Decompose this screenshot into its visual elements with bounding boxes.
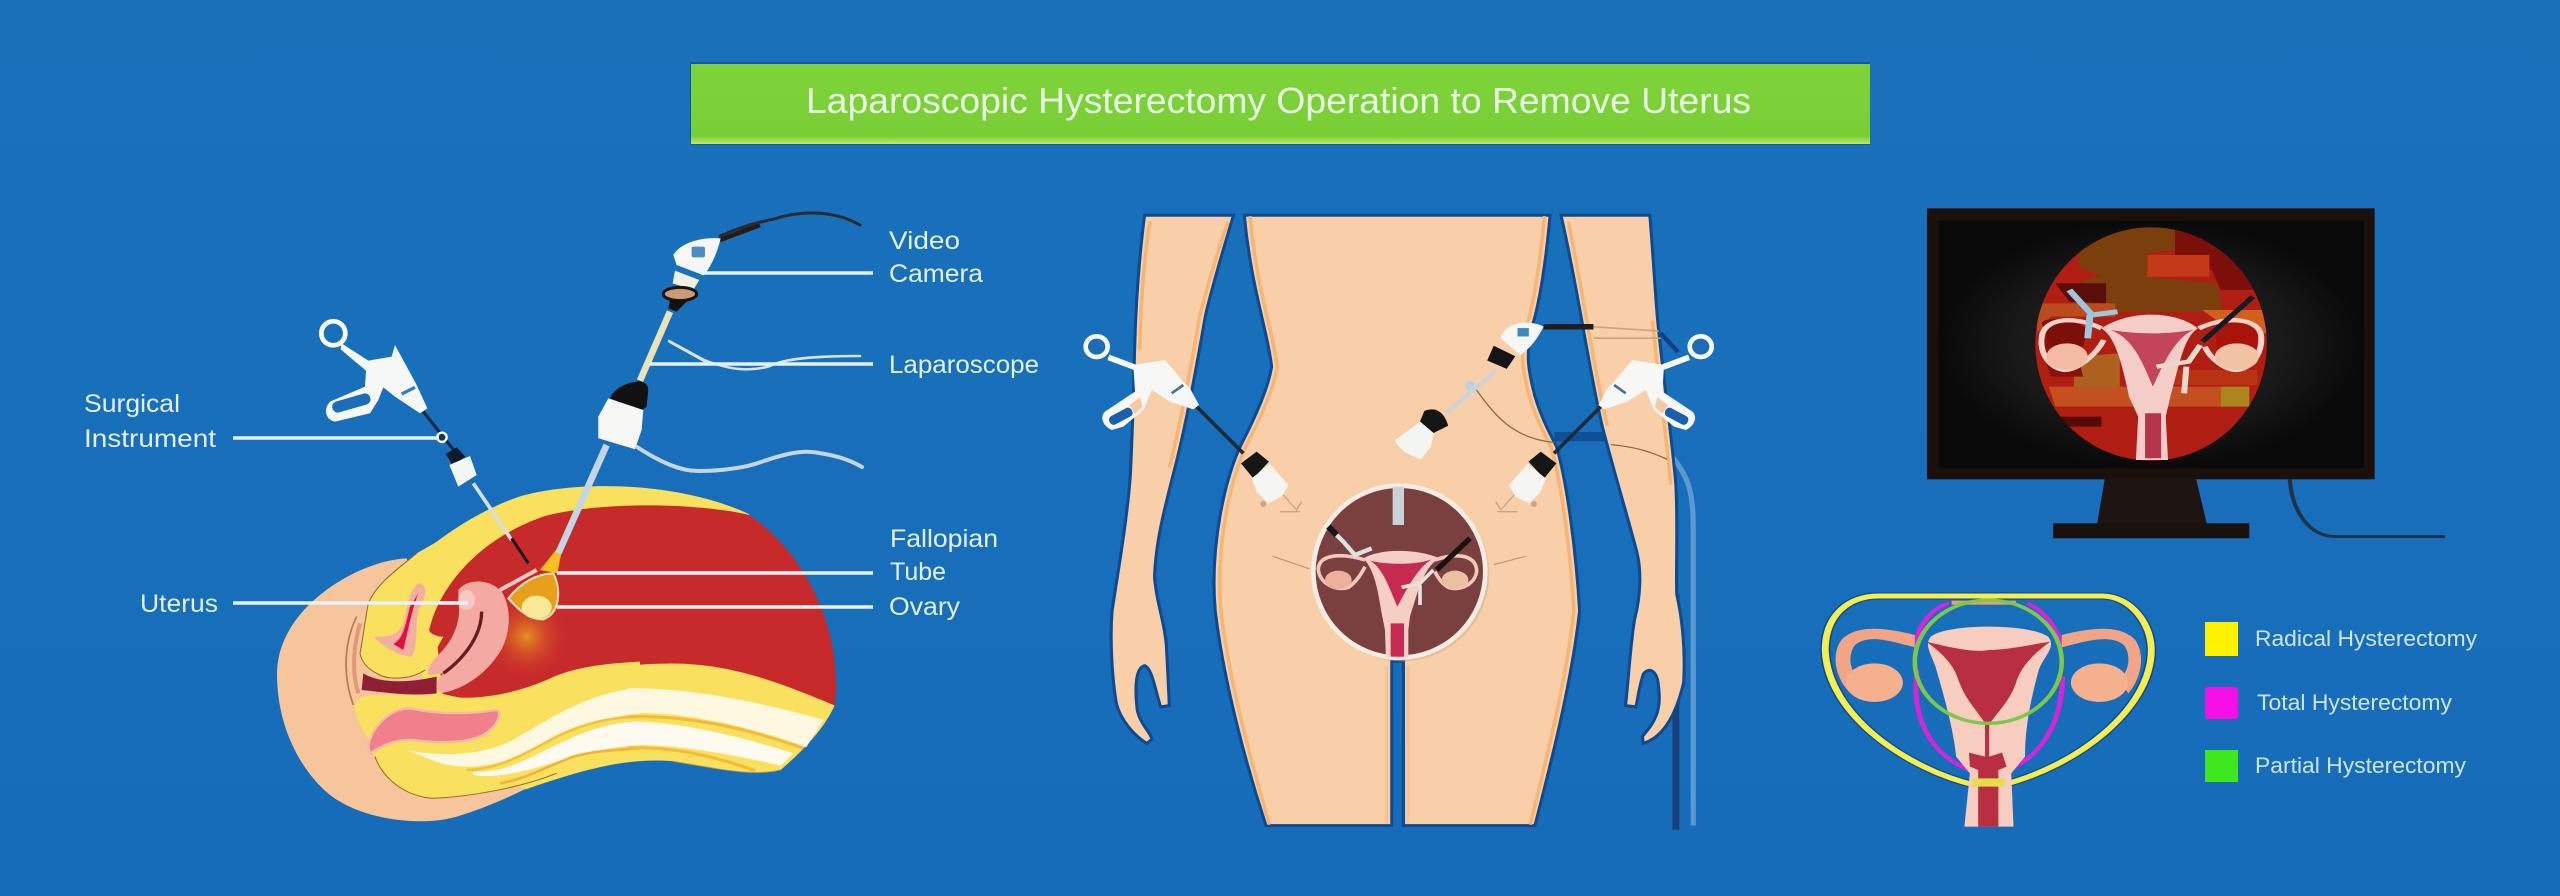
ovary and tube <box>500 570 537 590</box>
scope <box>558 225 760 553</box>
diagram: hysterectomy types <box>1825 596 2151 827</box>
total outline <box>1915 603 2063 770</box>
spine bands, right part <box>628 688 823 772</box>
label lines <box>233 273 873 607</box>
labels: side view: Tube <box>890 558 946 586</box>
rectum <box>368 708 499 753</box>
on-screen internal view <box>2033 227 2271 463</box>
panel: front-view body <box>1111 215 1693 830</box>
radical outline <box>1825 596 2151 785</box>
legend labels: Partial Hysterectomy <box>2255 753 2466 778</box>
monitor uterus <box>2041 290 2261 460</box>
legend labels <box>2255 626 2477 778</box>
partial outline <box>1915 600 2062 723</box>
labels: side view <box>84 227 1039 621</box>
uterine cavity <box>1926 642 2050 827</box>
center laparoscope <box>1395 323 1667 459</box>
uterus <box>428 581 509 693</box>
labels: side view: Laparoscope <box>889 351 1039 379</box>
uterus body <box>1928 627 2051 827</box>
glow <box>483 593 570 680</box>
labels: side view: Camera <box>889 260 983 288</box>
pelvic organs <box>346 540 640 798</box>
legend labels: Radical Hysterectomy <box>2255 626 2477 651</box>
labels: side view: Ovary <box>889 593 961 621</box>
body contour lines <box>1140 216 1671 825</box>
right grasper and trocar <box>1496 336 1712 512</box>
skin crease <box>346 617 357 705</box>
monitor cable <box>2290 479 2445 537</box>
tubes and ovaries <box>1836 629 2141 702</box>
torso <box>1214 215 1580 826</box>
monitor bezel <box>1927 208 2375 479</box>
spine bands <box>407 688 640 767</box>
swatch: partial <box>2205 750 2238 782</box>
title: Laparoscopic Hysterectomy Operation to Remove Uterus <box>806 80 1751 121</box>
dark band <box>362 673 437 694</box>
panel: monitor <box>1927 208 2445 538</box>
lower yellow fat <box>355 662 640 798</box>
tubes and cables <box>637 213 862 471</box>
legend <box>2205 622 2477 782</box>
labels: side view: Video <box>889 227 960 255</box>
inset: internal view circle <box>1313 486 1489 661</box>
labels: side view: Instrument <box>84 425 216 453</box>
labels: side view: Surgical <box>84 390 180 418</box>
right arm <box>1561 215 1684 743</box>
labels: side view: Uterus <box>140 590 218 618</box>
bladder <box>373 583 425 657</box>
upper yellow lobe <box>360 540 477 678</box>
title <box>690 62 1870 145</box>
labels: side view: Fallopian <box>890 525 998 553</box>
panel: side-view anatomy <box>277 486 836 821</box>
icon: surgical instrument and laparoscope <box>321 225 760 563</box>
swatch: total <box>2205 687 2238 719</box>
swatch: radical <box>2205 622 2238 656</box>
tubing behind body <box>1554 333 1693 830</box>
monitor screen <box>1938 221 2364 468</box>
left grasper and trocar <box>1086 336 1302 512</box>
legend labels: Total Hysterectomy <box>2257 690 2452 715</box>
grasper <box>321 321 528 563</box>
monitor stand <box>2097 477 2207 525</box>
skin <box>277 558 560 821</box>
left arm <box>1111 215 1233 743</box>
abdominal fat and cavity <box>392 486 836 789</box>
